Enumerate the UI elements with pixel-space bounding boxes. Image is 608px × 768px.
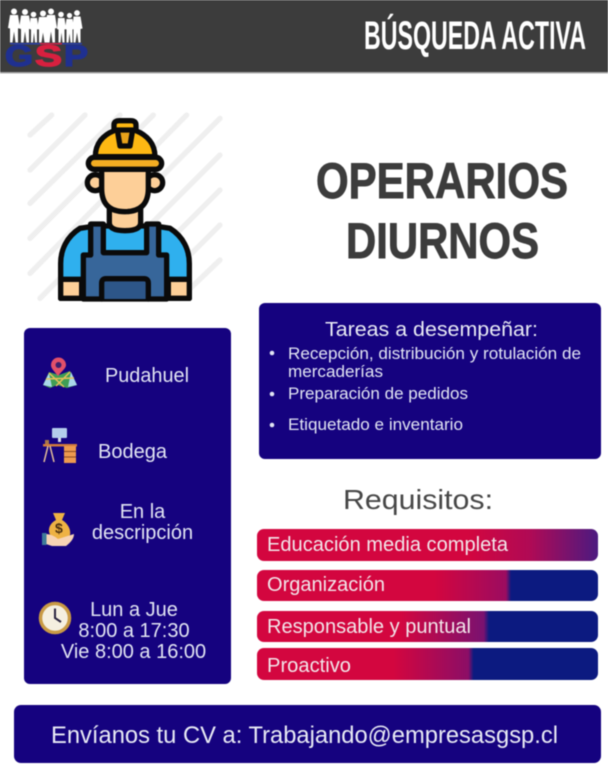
panel: tasks [259, 303, 601, 459]
tasks heading: Tareas a desempeñar: [325, 318, 538, 341]
panel: job details [24, 328, 231, 684]
bar: responsible: Responsable y puntual [267, 616, 471, 638]
icon: map pin [43, 358, 77, 388]
tasks list: mercaderías [288, 363, 383, 381]
logo feet accent [10, 43, 82, 44]
worker illustration [30, 115, 220, 299]
icon: money bag in hand [42, 513, 74, 546]
salary text [92, 501, 193, 544]
diagonal stripes background [30, 115, 220, 298]
shirt and arms [61, 226, 189, 298]
bar: education: Educación media completa [267, 534, 509, 556]
tasks list [270, 345, 581, 434]
tasks list: Etiquetado e inventario [288, 416, 463, 434]
contact banner [14, 705, 601, 763]
helmet ridge [117, 130, 133, 146]
logo letters GSP: P [64, 40, 88, 73]
schedule text: Lun a Jue [90, 599, 178, 621]
helmet dome [95, 121, 155, 157]
icon: clock [40, 604, 70, 632]
job title: OPERARIOS [316, 153, 568, 209]
requirements heading: Requisitos: [343, 484, 493, 515]
bar: organization [257, 570, 598, 601]
workplace text: Bodega [98, 440, 168, 463]
ears [87, 175, 103, 191]
contact banner: Envíanos tu CV a: Trabajando@empresasgsp.cl [51, 722, 558, 749]
schedule text: 8:00 a 17:30 [78, 620, 190, 642]
logo letters GSP: S [35, 40, 62, 73]
icon: desk [43, 428, 77, 463]
icon: money bag in hand: $ [55, 520, 63, 536]
requirements bars [257, 529, 598, 680]
bar: responsible [257, 611, 598, 642]
logo letters GSP: G [5, 40, 33, 73]
logo: GSP [5, 8, 88, 73]
helmet brim [88, 157, 162, 169]
hands [61, 279, 189, 298]
salary text: descripción [92, 522, 193, 544]
face [102, 167, 148, 212]
job title [316, 153, 568, 269]
schedule text: Vie 8:00 a 16:00 [61, 641, 206, 663]
worker figure [61, 121, 189, 299]
overalls pocket [102, 279, 148, 299]
bar: education [257, 529, 598, 561]
logo people silhouettes [8, 8, 82, 42]
tasks list: Preparación de pedidos [288, 385, 468, 403]
overalls [83, 224, 167, 299]
neck [109, 205, 141, 231]
bar: proactive: Proactivo [267, 655, 351, 677]
location text: Pudahuel [105, 364, 189, 387]
bar: proactive [257, 648, 598, 680]
header bar [0, 0, 608, 74]
tasks list: Recepción, distribución y rotulación de [288, 345, 581, 363]
schedule text [61, 599, 206, 663]
job title: DIURNOS [346, 213, 539, 269]
logo letters GSP [5, 40, 88, 73]
bar: organization: Organización [267, 574, 385, 596]
salary text: En la [120, 501, 166, 523]
